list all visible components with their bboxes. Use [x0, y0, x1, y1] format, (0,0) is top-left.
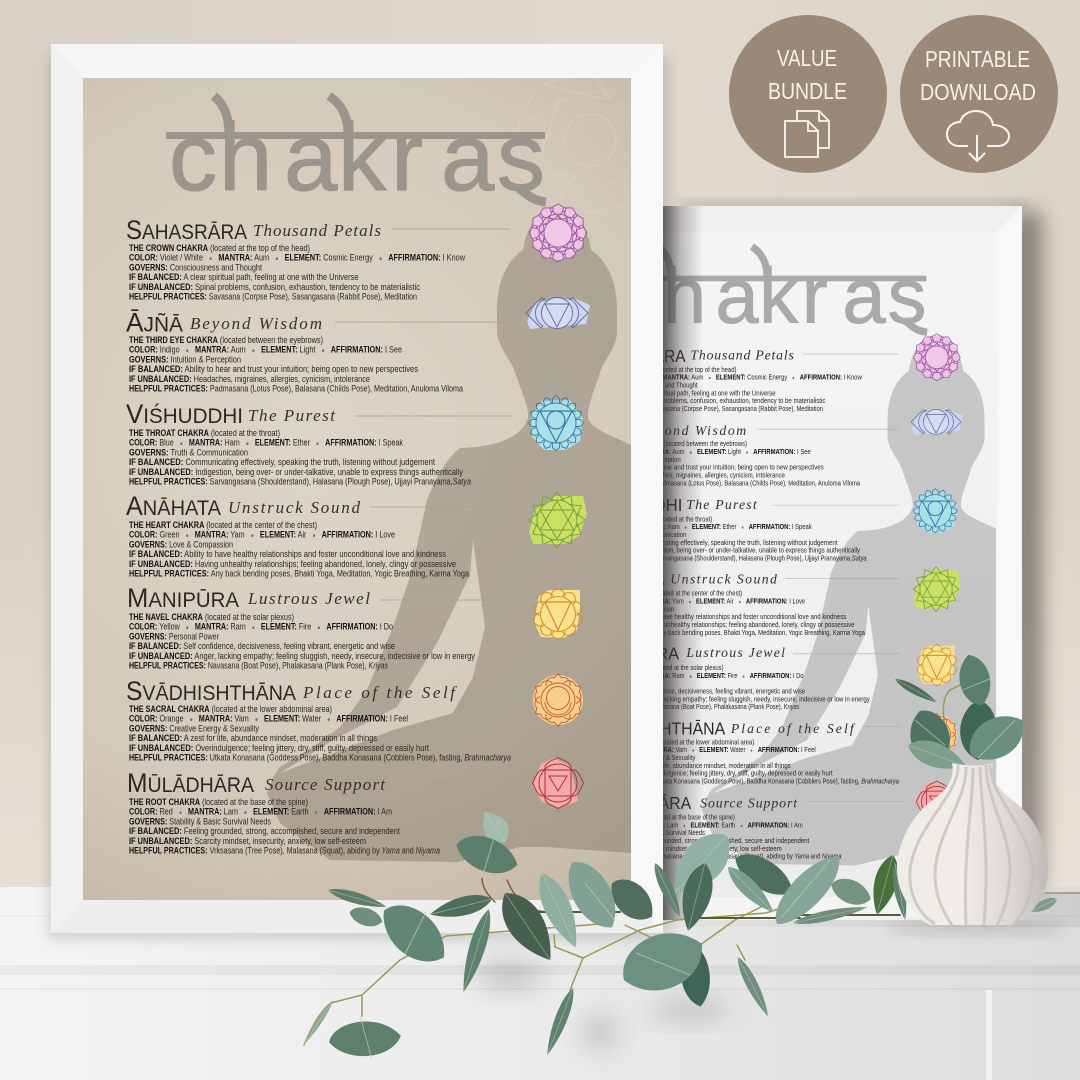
poster 2 section: Manipura: HELPFUL PRACTICES: Navasana (Boat Pose), Phalakasana (Plank Pose), Kriyas — [590, 702, 800, 711]
poster 2: artwork — [663, 244, 996, 866]
icon: documents — [785, 111, 829, 157]
poster 2 section: Anahata: IF BALANCED: Ability to have healthy relationships and foster unconditional love and kindness — [590, 612, 847, 621]
icon: crown chakra — [529, 204, 587, 262]
section: Ajna: Beyond Wisdom — [190, 314, 322, 333]
section: Svadhishthana — [126, 676, 511, 762]
section: Ajna: COLOR: Indigo ● MANTRA: Aum ● ELEMENT: Light ● AFFIRMATION: I See — [129, 345, 402, 355]
section: Muladhara: THE ROOT CHAKRA (located at the base of the spine) — [129, 797, 308, 807]
poster 2 section: Sahasrara: IF UNBALANCED: Spinal problems, confusion, exhaustion, tendency to be materialistic — [590, 396, 826, 405]
icon: sacral chakra — [529, 674, 587, 726]
icon: root chakra — [532, 758, 584, 808]
poster 2 section: Sahasrara: HELPFUL PRACTICES: Savasana (Corpse Pose), Sasangasana (Rabbit Pose), Meditation — [590, 404, 823, 413]
poster 2 title: chakras — [623, 254, 926, 340]
poster 2 section: Anahata: Unstruck Sound — [670, 572, 777, 587]
section: Sahasrara: IF UNBALANCED: Spinal problems, confusion, exhaustion, tendency to be materialistic — [129, 282, 420, 292]
poster 2 section: Vishuddhi: GOVERNS: Truth & Communication — [590, 530, 686, 539]
section: Sahasrara — [126, 215, 465, 302]
poster 2 section: Ajna: THE THIRD EYE CHAKRA (located between the eyebrows) — [590, 439, 747, 448]
section: Svadhishthana: SVĀDHISHTHĀNA — [126, 676, 297, 706]
section: Sahasrara: HELPFUL PRACTICES: Savasana (Corpse Pose), Sasangasana (Rabbit Pose), Meditation — [129, 292, 417, 302]
poster 2 section: Sahasrara: IF BALANCED: A clear spiritual path, feeling at one with the Universe — [590, 388, 776, 397]
poster 2 section: Ajna: HELPFUL PRACTICES: Padmasana (Lotus Pose), Balasana (Childs Pose), Meditation, Anuloma Viloma — [590, 478, 861, 487]
poster 2 section: Svadhishthana: IF BALANCED: A zest for life, abundance mindset, moderation in all things — [590, 761, 791, 770]
section: Manipura: Lustrous Jewel — [247, 589, 370, 608]
poster 2 section: Muladhara: GOVERNS: Stability & Basic Survival Needs — [590, 828, 705, 837]
badge: value bundle — [729, 15, 887, 173]
poster 2 section: Manipura: IF UNBALANCED: Anger, lacking empathy; feeling sluggish, needy, insecure, indecisive or low in energy — [590, 694, 870, 703]
section: Muladhara: COLOR: Red ● MANTRA: Lam ● ELEMENT: Earth ● AFFIRMATION: I Am — [129, 807, 392, 817]
poster 2 section: Ajna: Beyond Wisdom — [640, 423, 746, 438]
poster 1 shadow — [48, 56, 670, 940]
eucalyptus garland — [302, 805, 1080, 1060]
poster 2 rule lines — [757, 354, 902, 802]
poster 2 section: Manipura: Lustrous Jewel — [685, 645, 785, 660]
poster 2 section: Anahata — [663, 574, 865, 636]
icon: heart chakra — [529, 492, 587, 548]
section: Ajna: ĀJÑĀ — [126, 308, 184, 338]
section: Vishuddhi: HELPFUL PRACTICES: Sarvangasana (Shoulderstand), Halasana (Plough Pose), Ujjayi Pranayama,Satya — [129, 476, 471, 486]
section: Ajna: IF UNBALANCED: Headaches, migraines, allergies, cynicism, intolerance — [129, 374, 370, 384]
poster 2 section: Svadhishthana: THE SACRAL CHAKRA (located at the lower abdominal area) — [590, 737, 754, 746]
section: Anahata: GOVERNS: Love & Compassion — [129, 539, 233, 549]
section: Svadhishthana: COLOR: Orange ● MANTRA: Vam ● ELEMENT: Water ● AFFIRMATION: I Feel — [129, 714, 408, 724]
poster 2 section: Manipura: GOVERNS: Personal Power — [590, 679, 663, 688]
rule lines — [335, 228, 512, 600]
poster 2 section: Ajna — [663, 426, 860, 487]
poster 2 section: Ajna: GOVERNS: Intuition & Perception — [590, 455, 681, 464]
poster 2 section: Anahata: COLOR: Green ● MANTRA: Yam ● ELEMENT: Air ● AFFIRMATION: I Love — [590, 596, 805, 605]
poster 2 section: Manipura: IF BALANCED: Self confidence, decisiveness, feeling vibrant, energetic and wise — [590, 686, 805, 695]
section: Vishuddhi: COLOR: Blue ● MANTRA: Ham ● ELEMENT: Ether ● AFFIRMATION: I Speak — [129, 438, 403, 448]
section: Ajna: HELPFUL PRACTICES: Padmasana (Lotus Pose), Balasana (Childs Pose), Meditation, Anuloma Viloma — [129, 384, 463, 394]
leaf veins — [360, 838, 830, 1060]
badge: printable download — [900, 15, 1058, 173]
poster 2 section: Anahata: HELPFUL PRACTICES: Any back bending poses, Bhakti Yoga, Meditation, Yogic Breathing, Karma Yoga — [590, 628, 866, 637]
shadow cast on poster 2 by poster 1 — [663, 206, 703, 920]
section: Sahasrara: GOVERNS: Consciousness and Thought — [129, 262, 262, 272]
poster 2 section: Svadhishthana: SVĀDHISHTHĀNA — [588, 715, 726, 740]
section: Svadhishthana: IF BALANCED: A zest for life, abundance mindset, moderation in all things — [129, 733, 377, 743]
shadows cast by foliage — [476, 922, 1065, 1052]
shelf — [0, 887, 1080, 1080]
poster 2 section: Svadhishthana: HELPFUL PRACTICES: Utkata Konasana (Goddess Pose), Baddha Konasana (Cobblers Pose), fasting, Brahmacharya — [590, 776, 899, 785]
section: Svadhishthana: HELPFUL PRACTICES: Utkata Konasana (Goddess Pose), Baddha Konasana (Cobblers Pose), fasting, Brahmacharya — [129, 752, 511, 762]
poster 2 section: Svadhishthana: IF UNBALANCED: Overindulgence; feeling jittery, dry, stiff, guilty, depressed or easily hurt — [590, 769, 833, 778]
poster 2 section: Vishuddhi: IF BALANCED: Communicating effectively, speaking the truth, listening without judgement — [590, 538, 837, 547]
section: Manipura: THE NAVEL CHAKRA (located at the solar plexus) — [129, 612, 294, 622]
poster 2 section: Sahasrara — [663, 350, 862, 412]
poster 2 section: Svadhishthana: Place of the Self — [730, 721, 856, 736]
poster 2 section: Vishuddhi: THE THROAT CHAKRA (located at the throat) — [590, 514, 712, 523]
poster 2 section: Sahasrara: Thousand Petals — [690, 348, 794, 363]
badge: value bundle: BUNDLE — [768, 78, 847, 104]
section: Ajna — [126, 308, 463, 394]
poster 2 section: Vishuddhi: IF UNBALANCED: Indigestion, being over- or under-talkative, unable to express things authentically — [590, 546, 860, 555]
poster 2 section: Vishuddhi — [663, 499, 866, 562]
section: Sahasrara: IF BALANCED: A clear spiritual path, feeling at one with the Universe — [129, 272, 358, 282]
section: Anahata: THE HEART CHAKRA (located at the center of the chest) — [129, 520, 317, 530]
poster 2 section: Vishuddhi: VIŚHUDDHI — [588, 491, 682, 516]
title: chakras: chakras — [169, 104, 545, 211]
poster 1: artwork — [83, 68, 662, 900]
poster 2 shadow — [680, 201, 1042, 888]
section: Anahata: IF UNBALANCED: Having unhealthy relationships; feeling abandoned, lonely, clingy or possessive — [129, 559, 456, 569]
poster 2 section: Manipura: MANIPŪRA — [589, 639, 680, 664]
section: Ajna: THE THIRD EYE CHAKRA (located between the eyebrows) — [129, 335, 323, 345]
meditating figure silhouette — [267, 206, 631, 862]
section: Sahasrara: COLOR: Violet / White ● MANTRA: Aum ● ELEMENT: Cosmic Energy ● AFFIRMATION: I Know — [129, 253, 465, 263]
section: Manipura: HELPFUL PRACTICES: Navasana (Boat Pose), Phalakasana (Plank Pose), Kriyas — [129, 660, 388, 670]
poster 2 section: Sahasrara: GOVERNS: Consciousness and Thought — [590, 380, 698, 389]
section: Muladhara: HELPFUL PRACTICES: Vrksasana (Tree Pose), Malasana (Squat), abiding by Yama and Niyama — [129, 846, 440, 856]
section: Svadhishthana: THE SACRAL CHAKRA (located at the lower abdominal area) — [129, 704, 332, 714]
poster 2 section: Anahata: THE HEART CHAKRA (located at the center of the chest) — [590, 589, 742, 598]
section: Anahata — [126, 491, 469, 578]
section: Muladhara: IF BALANCED: Feeling grounded, strong, accomplished, secure and independent — [129, 826, 400, 836]
poster 2 section: Anahata: ANĀHATA — [588, 565, 665, 590]
poster 2 section: Muladhara: HELPFUL PRACTICES: Vrksasana (Tree Pose), Malasana (Squat), abiding by Yama and Niyama — [590, 852, 842, 861]
poster 2 section: Svadhishthana — [663, 720, 899, 785]
ceramic vase with eucalyptus sprig — [893, 651, 1048, 925]
section: Manipura: IF BALANCED: Self confidence, decisiveness, feeling vibrant, energetic and wise — [129, 641, 395, 651]
section: Manipura: GOVERNS: Personal Power — [129, 631, 219, 641]
poster 2 silhouette — [702, 335, 996, 865]
section: Vishuddhi: VIŚHUDDHI — [126, 399, 243, 429]
poster 2 section: Anahata: GOVERNS: Love & Compassion — [590, 604, 674, 613]
poster 2 section: Manipura: COLOR: Yellow ● MANTRA: Ram ● ELEMENT: Fire ● AFFIRMATION: I Do — [590, 671, 804, 680]
section: Muladhara: IF UNBALANCED: Scarcity mindset, insecurity, anxiety, low self-esteem — [129, 836, 366, 846]
vase ribs — [910, 765, 1033, 925]
poster 1: white frame — [51, 44, 663, 933]
poster 2 section: Muladhara — [663, 794, 842, 860]
section: Sahasrara: Thousand Petals — [253, 221, 381, 240]
poster 2 section: Ajna: IF BALANCED: Ability to hear and trust your intuition; being open to new perspectives — [590, 463, 824, 472]
section: Manipura: MANIPŪRA — [127, 583, 240, 613]
poster 2 section: Ajna: COLOR: Indigo ● MANTRA: Aum ● ELEMENT: Light ● AFFIRMATION: I See — [590, 447, 811, 456]
poster 2: white frame — [600, 206, 1022, 920]
badge: value bundle: VALUE — [777, 45, 837, 71]
poster 2 section: Muladhara: COLOR: Red ● MANTRA: Lam ● ELEMENT: Earth ● AFFIRMATION: I Am — [590, 820, 803, 829]
section: Anahata: IF BALANCED: Ability to have healthy relationships and foster unconditional love and kindness — [129, 549, 446, 559]
section: Svadhishthana: GOVERNS: Creative Energy & Sexuality — [129, 723, 259, 733]
poster 2 section: Muladhara: Source Support — [700, 795, 798, 810]
section: Ajna: GOVERNS: Intuition & Perception — [129, 354, 241, 364]
icon: solar plexus chakra — [532, 588, 584, 640]
icon: throat chakra — [527, 394, 585, 452]
section: Muladhara: MŪLĀDHĀRA — [127, 768, 255, 798]
section: Vishuddhi: GOVERNS: Truth & Communication — [129, 447, 248, 457]
section: Muladhara: GOVERNS: Stability & Basic Survival Needs — [129, 816, 271, 826]
section: Svadhishthana: Place of the Self — [302, 683, 457, 702]
section: Manipura — [127, 583, 475, 670]
chakra icons column — [526, 204, 590, 808]
section: Muladhara — [127, 768, 440, 856]
section: Muladhara: Source Support — [265, 775, 386, 794]
poster 2 section: Sahasrara: SAHASRĀRA — [588, 342, 686, 367]
section: Sahasrara: SAHASRĀRA — [126, 215, 248, 245]
section: Anahata: HELPFUL PRACTICES: Any back bending poses, Bhakti Yoga, Meditation, Yogic Breathing, Karma Yoga — [129, 568, 469, 578]
section: Anahata: Unstruck Sound — [228, 498, 360, 517]
poster 2 section: Ajna: ĀJÑĀ — [588, 417, 634, 442]
section: Anahata: COLOR: Green ● MANTRA: Yam ● ELEMENT: Air ● AFFIRMATION: I Love — [129, 530, 395, 540]
icon: cloud download — [947, 111, 1009, 161]
mandala watermark — [527, 78, 631, 181]
poster 2 section: Svadhishthana: COLOR: Orange ● MANTRA: Vam ● ELEMENT: Water ● AFFIRMATION: I Feel — [590, 745, 816, 754]
vase sprig leaves — [893, 651, 1033, 778]
poster 2 section: Muladhara: THE ROOT CHAKRA (located at the base of the spine) — [590, 812, 735, 821]
poster 2 section: Anahata: IF UNBALANCED: Having unhealthy relationships; feeling abandoned, lonely, clingy or possessive — [590, 620, 854, 629]
poster 2 section: Vishuddhi: The Purest — [686, 497, 758, 512]
vase body — [897, 763, 1048, 925]
section: Manipura: COLOR: Yellow ● MANTRA: Ram ● ELEMENT: Fire ● AFFIRMATION: I Do — [129, 622, 393, 632]
poster 2 section: Svadhishthana: GOVERNS: Creative Energy & Sexuality — [590, 753, 696, 762]
poster 2 chakra icons — [911, 334, 963, 822]
section: Svadhishthana: IF UNBALANCED: Overindulgence; feeling jittery, dry, stiff, guilty, depressed or easily hurt — [129, 743, 429, 753]
poster 2 section: Sahasrara: THE CROWN CHAKRA (located at the top of the head) — [590, 365, 736, 374]
section: Vishuddhi: IF BALANCED: Communicating effectively, speaking the truth, listening without judgement — [129, 457, 435, 467]
badge: printable download: PRINTABLE — [925, 46, 1030, 72]
poster 2 section: Ajna: IF UNBALANCED: Headaches, migraines, allergies, cynicism, intolerance — [590, 470, 785, 479]
section: Ajna: IF BALANCED: Ability to hear and trust your intuition; being open to new perspectives — [129, 364, 418, 374]
section: Vishuddhi: The Purest — [248, 406, 336, 425]
poster 2 section: Vishuddhi: COLOR: Blue ● MANTRA: Ham ● ELEMENT: Ether ● AFFIRMATION: I Speak — [590, 522, 812, 531]
section: Sahasrara: THE CROWN CHAKRA (located at the top of the head) — [129, 243, 310, 253]
icon: third eye chakra — [526, 298, 590, 329]
section: Vishuddhi: IF UNBALANCED: Indigestion, being over- or under-talkative, unable to express things authentically — [129, 467, 463, 477]
poster 2 section: Manipura: THE NAVEL CHAKRA (located at the solar plexus) — [590, 663, 724, 672]
poster 2 section: Muladhara: IF UNBALANCED: Scarcity mindset, insecurity, anxiety, low self-esteem — [590, 844, 782, 853]
poster 2 section: Muladhara: IF BALANCED: Feeling grounded, strong, accomplished, secure and independent — [590, 836, 809, 845]
garland stems — [304, 878, 1080, 1045]
badge: printable download: DOWNLOAD — [920, 79, 1036, 105]
section: Anahata: ANĀHATA — [126, 491, 222, 521]
poster 2 section: Muladhara: MŪLĀDHĀRA — [589, 789, 692, 814]
poster 2 section: Sahasrara: COLOR: Violet / White ● MANTRA: Aum ● ELEMENT: Cosmic Energy ● AFFIRMATION: I Know — [590, 373, 862, 382]
section: Vishuddhi — [126, 399, 471, 486]
section: Manipura: IF UNBALANCED: Anger, lacking empathy; feeling sluggish, needy, insecure, indecisive or low in energy — [129, 651, 475, 661]
poster 2 section: Vishuddhi: HELPFUL PRACTICES: Sarvangasana (Shoulderstand), Halasana (Plough Pose), Ujjayi Pranayama,Satya — [590, 553, 867, 562]
section: Vishuddhi: THE THROAT CHAKRA (located at the throat) — [129, 428, 280, 438]
poster 2 section: Manipura — [663, 648, 870, 710]
